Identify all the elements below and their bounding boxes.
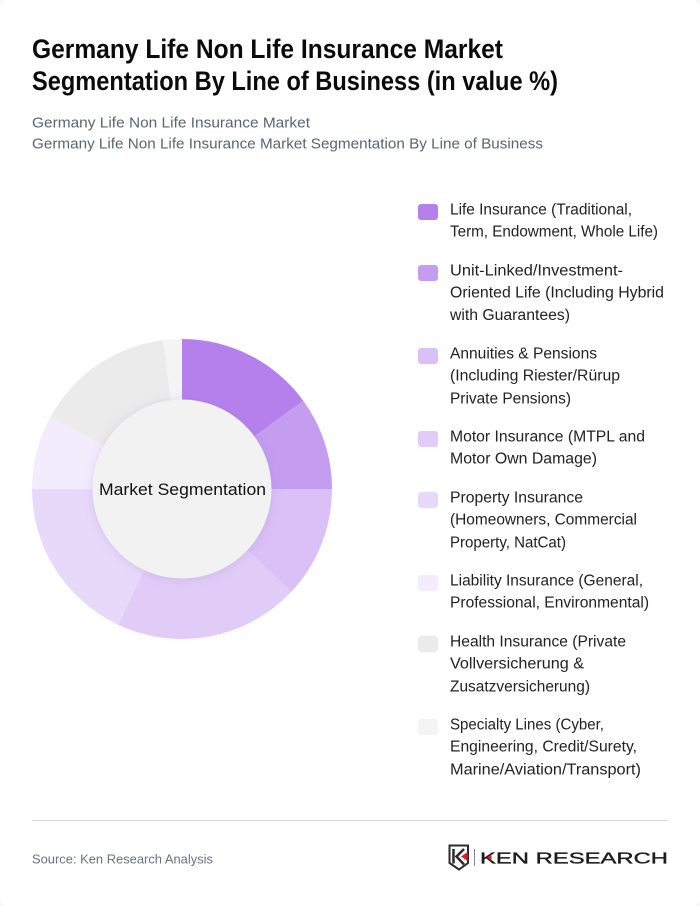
legend item: unit-linked: Oriented Life (Including Hybrid xyxy=(450,285,664,302)
legend item: unit-linked: Unit-Linked/Investment- xyxy=(450,263,623,280)
legend item: motor: Motor Insurance (MTPL and xyxy=(450,428,645,445)
legend xyxy=(418,201,664,779)
title: Germany Life Non Life Insurance Market xyxy=(32,34,503,64)
legend item: specialty xyxy=(418,716,641,779)
segment: specialty xyxy=(163,339,182,489)
source note: Source: Ken Research Analysis xyxy=(32,852,213,866)
legend item: liability: Professional, Environmental) xyxy=(450,595,649,612)
legend item: specialty: Engineering, Credit/Surety, xyxy=(450,739,637,756)
legend item: property xyxy=(418,489,637,552)
segment: liability xyxy=(32,417,182,489)
legend item: health: Zusatzversicherung) xyxy=(450,679,590,696)
legend item: health: Vollversicherung & xyxy=(450,656,585,673)
legend item: property: (Homeowners, Commercial xyxy=(450,512,637,529)
legend item: property: Property, NatCat) xyxy=(450,535,566,552)
legend item: health: Health Insurance (Private xyxy=(450,633,626,650)
legend item: health xyxy=(418,633,626,696)
subtitle: Germany Life Non Life Insurance Market xyxy=(32,114,311,132)
legend item: life insurance: Life Insurance (Traditional, xyxy=(450,201,632,218)
centre label: Market Segmentation xyxy=(99,480,266,499)
legend item: annuities: Annuities & Pensions xyxy=(450,345,597,362)
legend item: unit-linked xyxy=(418,263,664,324)
subtitle xyxy=(32,114,543,152)
legend item: annuities xyxy=(418,345,620,408)
legend item: annuities: Private Pensions) xyxy=(450,391,571,408)
legend item: specialty: Marine/Aviation/Transport) xyxy=(450,762,641,779)
segment: unit-linked xyxy=(182,401,332,489)
legend item: motor: Motor Own Damage) xyxy=(450,451,597,468)
donut chart xyxy=(32,339,332,639)
donut centre xyxy=(92,400,272,578)
subtitle: Germany Life Non Life Insurance Market Segmentation By Line of Business xyxy=(32,136,543,152)
segment: motor xyxy=(118,489,291,639)
title xyxy=(32,34,558,96)
segment: life insurance xyxy=(182,339,303,489)
legend item: life insurance xyxy=(418,201,658,241)
legend item: liability: Liability Insurance (General, xyxy=(450,572,643,589)
icon: red wedge xyxy=(487,854,492,861)
icon: shield xyxy=(450,846,468,870)
legend item: annuities: (Including Riester/Rürup xyxy=(450,368,620,385)
segment: health xyxy=(51,340,182,489)
legend item: unit-linked: with Guarantees) xyxy=(449,307,570,324)
segment: annuities xyxy=(182,489,332,592)
logo wordmark: KEN RESEARCH xyxy=(480,850,668,868)
segment: property xyxy=(32,489,182,625)
legend item: life insurance: Term, Endowment, Whole Life) xyxy=(450,224,658,241)
logo: Ken Research xyxy=(450,846,668,870)
legend item: property: Property Insurance xyxy=(450,489,583,506)
legend item: motor xyxy=(418,428,645,468)
legend item: liability xyxy=(418,572,649,612)
title: Segmentation By Line of Business (in value %) xyxy=(32,66,558,96)
legend item: specialty: Specialty Lines (Cyber, xyxy=(450,716,604,733)
